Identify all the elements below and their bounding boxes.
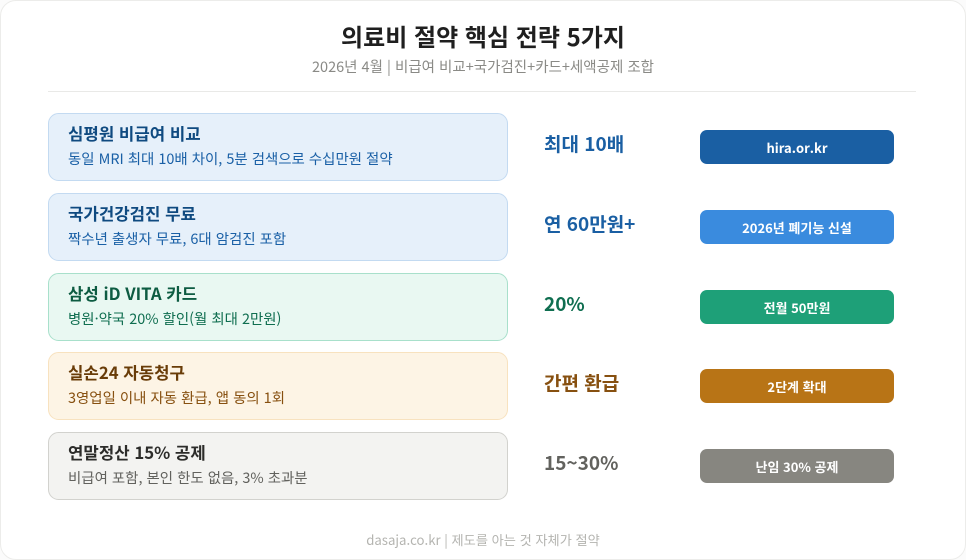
row 2: 국가건강검진 무료	[48, 193, 894, 261]
tag	[700, 449, 894, 483]
description: 비급여 포함, 본인 한도 없음, 3% 초과분	[68, 467, 308, 488]
tag	[700, 290, 894, 324]
description: 동일 MRI 최대 10배 차이, 5분 검색으로 수십만원 절약	[68, 148, 393, 169]
heading: 실손24 자동청구	[68, 360, 185, 384]
row 4: 실손24 자동청구	[48, 352, 894, 420]
heading: 국가건강검진 무료	[68, 201, 196, 225]
subtitle: 2026년 4월 | 비급여 비교+국가검진+카드+세액공제 조합	[312, 56, 654, 77]
heading: 심평원 비급여 비교	[68, 121, 201, 145]
row 3: 삼성 iD VITA 카드	[48, 273, 894, 341]
description: 병원·약국 20% 할인(월 최대 2만원)	[68, 308, 281, 329]
tag	[700, 130, 894, 164]
panel: 국가건강검진	[48, 193, 508, 261]
panel: 삼성 카드	[48, 273, 508, 341]
row 1: 심평원 비급여 비교	[48, 113, 894, 181]
panel: 연말정산	[48, 432, 508, 500]
tag: 난임 30% 공제	[756, 457, 838, 476]
value: 20%	[544, 290, 585, 317]
tag	[700, 210, 894, 244]
value: 간편 환급	[544, 369, 619, 396]
footer: dasaja.co.kr | 제도를 아는 것 자체가 절약	[366, 530, 600, 549]
value: 연 60만원+	[544, 210, 635, 237]
value: 15~30%	[544, 449, 618, 476]
tag: 2026년 폐기능 신설	[742, 218, 852, 237]
description: 짝수년 출생자 무료, 6대 암검진 포함	[68, 228, 286, 249]
heading: 연말정산 15% 공제	[68, 440, 206, 464]
tag	[700, 369, 894, 403]
description: 3영업일 이내 자동 환급, 앱 동의 1회	[68, 387, 285, 408]
heading: 삼성 iD VITA 카드	[68, 281, 197, 305]
row 5: 연말정산 15% 공제	[48, 432, 894, 500]
tag: hira.or.kr	[766, 138, 828, 157]
value: 최대 10배	[544, 130, 624, 157]
tag: 전월 50만원	[764, 298, 830, 317]
title: 의료비 절약 핵심 전략 5가지	[341, 18, 625, 53]
panel: 실손24	[48, 352, 508, 420]
tag: 2단계 확대	[767, 377, 827, 396]
panel: 심평원	[48, 113, 508, 181]
